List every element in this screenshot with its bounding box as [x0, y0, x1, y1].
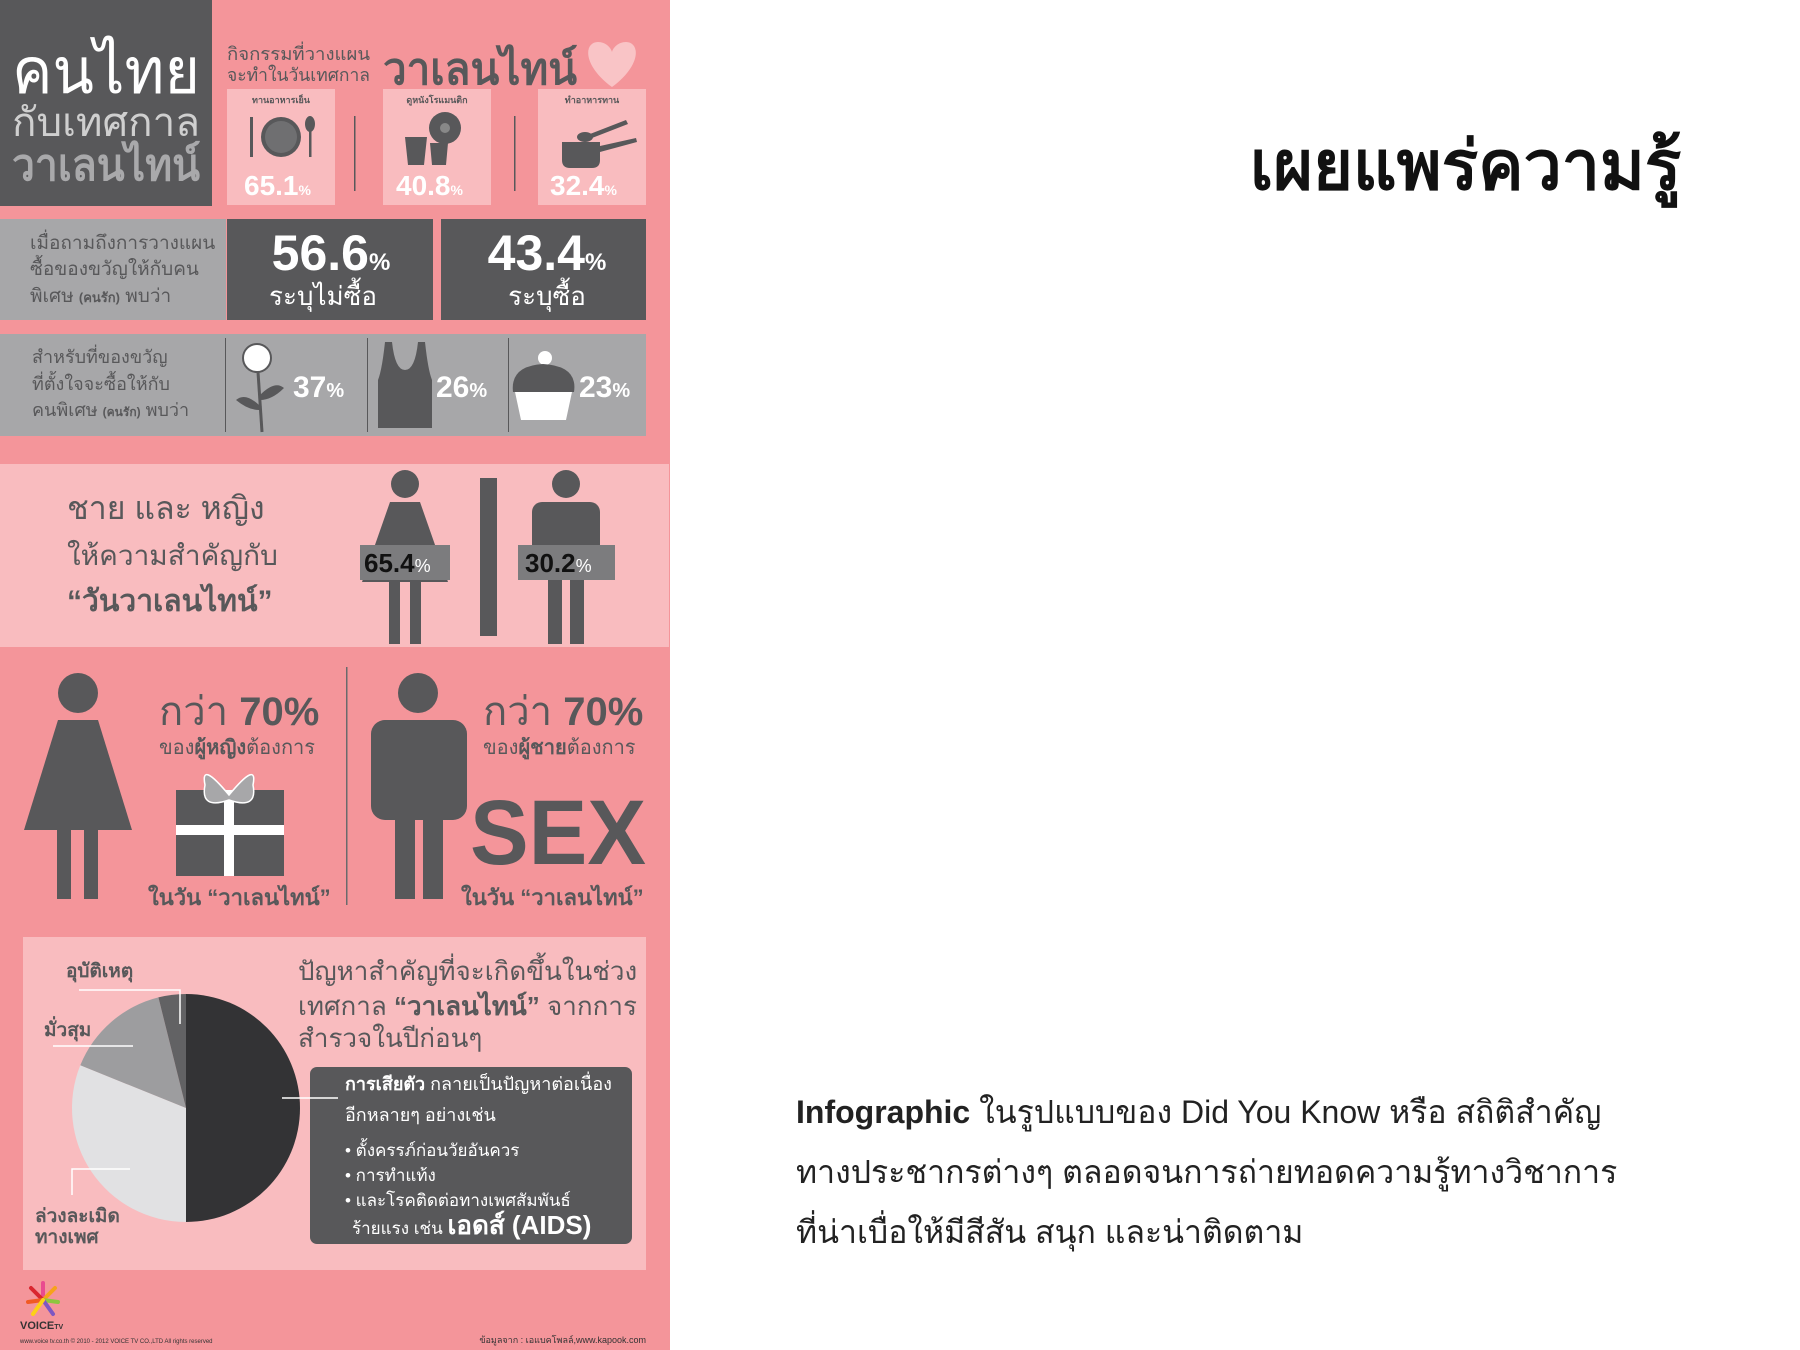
callout: loss of virginity: • และโรคติดต่อทางเพศสัมพันธ์: [345, 1190, 571, 1210]
infographic panel: [0, 0, 670, 1350]
panel: gift types: ที่ตั้งใจจะซื้อให้กับ: [32, 371, 170, 394]
panel: gift planning: ระบุไม่ซื้อ: [269, 277, 377, 312]
panel: problems pie: สำรวจในปีก่อนๆ: [298, 1023, 482, 1053]
icon: woman small: [360, 470, 450, 644]
panel: problems pie: [23, 937, 646, 1270]
callout: loss of virginity: การเสียตัว กลายเป็นปัญหาต่อเนื่อง: [345, 1071, 612, 1094]
title block: วาเลนไทน์: [12, 139, 200, 190]
panel: what women/men want: ของผู้ชายต้องการ: [483, 736, 636, 761]
heading: activities: วาเลนไทน์: [383, 43, 577, 94]
panel: problems pie: ปัญหาสำคัญที่จะเกิดขึ้นในช่วง: [298, 952, 637, 986]
title block: กับเทศกาล: [12, 101, 200, 145]
panel: gift types: 23%: [579, 371, 630, 404]
heading: activities: กิจกรรมที่วางแผน: [227, 41, 370, 64]
heading: activities: จะทำในวันเทศกาล: [227, 64, 370, 85]
activity: dinner: [227, 89, 335, 205]
activity: dinner: ทานอาหารเย็น: [252, 93, 311, 105]
heading: activities: [227, 41, 577, 94]
panel: men vs women: [0, 464, 669, 647]
panel: what women/men want: ในวัน “วาเลนไทน์”: [148, 884, 331, 910]
panel: men vs women: ให้ความสำคัญกับ: [67, 539, 278, 571]
logo: voice tv: VOICETV: [20, 1320, 64, 1332]
panel: gift planning: เมื่อถามถึงการวางแผน: [30, 229, 215, 254]
activity: cooking: [538, 89, 646, 205]
panel: problems pie: เทศกาล “วาเลนไทน์” จากการ: [298, 990, 637, 1021]
panel: what women/men want: กว่า 70%: [159, 690, 319, 734]
logo: voice tv: www.voice tv.co.th © 2010 - 2012 VOICE TV CO.,LTD All rights reserved: [19, 1338, 212, 1345]
panel: problems pie: อุบัติเหตุ: [66, 961, 133, 983]
panel: what women/men want: SEX: [470, 782, 646, 884]
activity: romantic movie: 40.8%: [396, 170, 464, 201]
panel: problems pie: ล่วงละเมิด: [35, 1206, 120, 1227]
pie chart: [72, 994, 300, 1222]
icon: woman big: [24, 673, 132, 899]
panel: gift types: 37%: [293, 371, 344, 404]
panel: men vs women: ชาย และ หญิง: [67, 490, 265, 526]
panel: what women/men want: ในวัน “วาเลนไทน์”: [461, 884, 644, 910]
callout: loss of virginity: อีกหลายๆ อย่างเช่น: [345, 1105, 496, 1125]
panel: what women/men want: ของผู้หญิงต้องการ: [159, 736, 315, 761]
text block: description: Infographic ในรูปแบบของ Did You Know หรือ สถิติสำคัญ: [796, 1094, 1601, 1130]
title block: คนไทย: [12, 35, 200, 107]
panel: gift types: [0, 334, 646, 436]
text block: description: ที่น่าเบื่อให้มีสีสัน สนุก และน่าติดตาม: [796, 1214, 1303, 1250]
activity: romantic movie: ดูหนังโรแมนติก: [406, 94, 468, 106]
text block: description: ทางประชากรต่างๆ ตลอดจนการถ่ายทอดความรู้ทางวิชาการ: [796, 1154, 1617, 1190]
panel: gift planning: ระบุซื้อ: [508, 277, 586, 312]
panel: gift types: คนพิเศษ (คนรัก) พบว่า: [32, 400, 189, 420]
callout: loss of virginity: [282, 1067, 632, 1244]
callout: loss of virginity: • ตั้งครรภ์ก่อนวัยอันควร: [345, 1138, 519, 1160]
activity: romantic movie: [383, 89, 491, 205]
panel: problems pie: มั่วสุม: [44, 1016, 91, 1042]
panel: gift types: สำหรับที่ของขวัญ: [32, 344, 168, 367]
callout: loss of virginity: ร้ายแรง เช่น เอดส์ (AIDS): [352, 1210, 591, 1240]
icon: woman small: 65.4%: [364, 548, 431, 578]
icon: man small: [518, 470, 615, 644]
panel: men vs women: “วันวาเลนไทน์”: [67, 583, 273, 618]
title block: [0, 0, 212, 206]
title: right heading: เผยแพร่ความรู้: [1250, 128, 1681, 204]
panel: gift planning: ซื้อของขวัญให้กับคน: [30, 255, 199, 280]
panel: gift planning: 43.4%: [488, 225, 606, 281]
panel: gift planning: พิเศษ (คนรัก) พบว่า: [30, 286, 171, 307]
panel: problems pie: ทางเพศ: [35, 1227, 99, 1248]
logo: voice tv: [19, 1283, 212, 1345]
icon: man small: 30.2%: [525, 548, 592, 578]
panel: gift planning: [0, 219, 646, 320]
activity: cooking: ทำอาหารทาน: [565, 95, 620, 105]
panel: what women/men want: กว่า 70%: [483, 690, 643, 734]
icon: gift: [176, 775, 284, 876]
activity: dinner: 65.1%: [244, 170, 312, 201]
icon: heart: [588, 42, 636, 87]
source credit: ข้อมูลจาก : เอแบคโพลล์,www.kapook.com: [479, 1334, 646, 1346]
icon: man big: [371, 673, 467, 899]
callout: loss of virginity: • การทำแท้ง: [345, 1166, 436, 1185]
panel: what women/men want: [24, 667, 646, 910]
text block: description: [796, 1094, 1617, 1252]
panel: gift types: 26%: [436, 371, 487, 404]
activity: cooking: 32.4%: [550, 170, 618, 201]
panel: gift planning: 56.6%: [272, 225, 390, 281]
